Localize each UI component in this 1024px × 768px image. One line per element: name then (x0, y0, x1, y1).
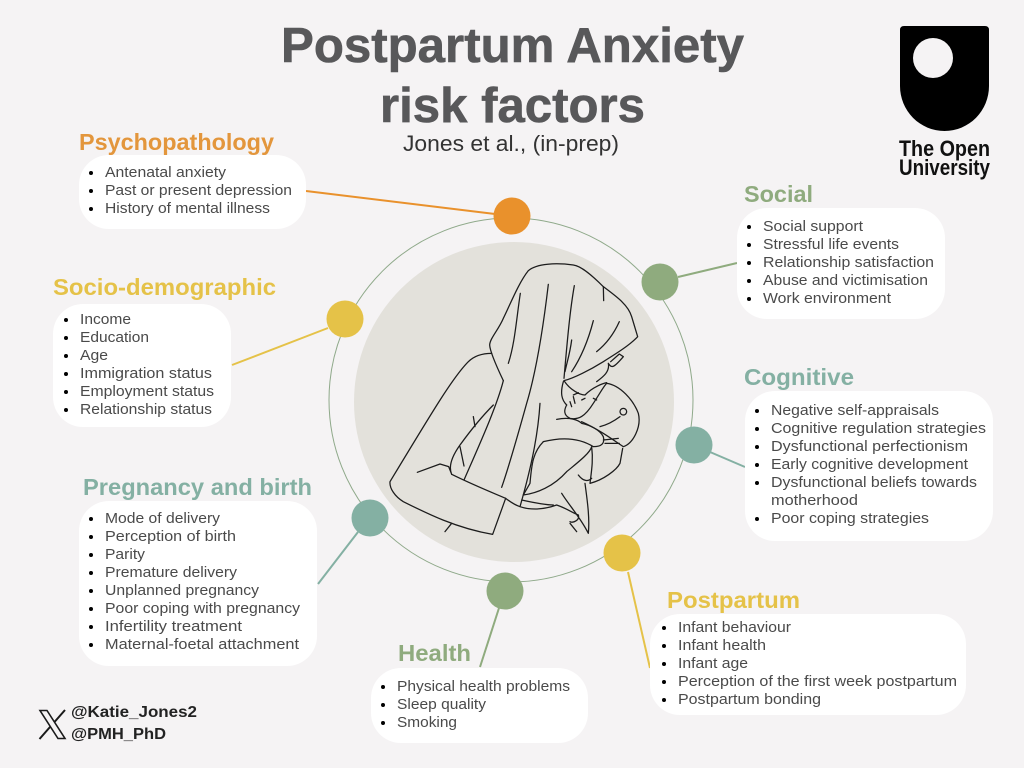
panel: pregnancy and birth (79, 474, 317, 666)
panel: cognitive: Dysfunctional beliefs towards (771, 475, 977, 491)
panel: social: Social (744, 181, 813, 207)
connector: socio-demographic (232, 328, 328, 365)
panel: social (737, 181, 945, 319)
connector: postpartum (628, 572, 650, 668)
panel: socio-demographic: Relationship status (80, 402, 212, 418)
panel: pregnancy and birth: Infertility treatment (105, 619, 242, 635)
panel: health: Smoking (397, 715, 457, 731)
panel: social: Social support (763, 219, 863, 235)
panel: socio-demographic: Socio-demographic (53, 274, 276, 300)
connector: cognitive (710, 452, 745, 467)
panel: postpartum: Infant health (678, 638, 766, 654)
social handles: @Katie_Jones2 (71, 704, 197, 721)
panel: psychopathology: Psychopathology (79, 129, 274, 155)
panel: health: Physical health problems (397, 679, 570, 695)
panel: social: Relationship satisfaction (763, 255, 934, 271)
panel: socio-demographic: Employment status (80, 384, 214, 400)
illustration: mother holding baby (390, 264, 639, 534)
panel: cognitive: Dysfunctional perfectionism (771, 439, 968, 455)
panel: social: Abuse and victimisation (763, 273, 928, 289)
panel: cognitive: Cognitive (744, 364, 854, 390)
panel: health (371, 640, 588, 743)
panel: cognitive: Early cognitive development (771, 457, 968, 473)
title: Postpartum Anxiety (281, 19, 744, 73)
title: risk factors (380, 79, 645, 133)
panel: social: Work environment (763, 291, 891, 307)
panel: pregnancy and birth: Perception of birth (105, 529, 236, 545)
social handles (71, 704, 197, 743)
panel: pregnancy and birth: Mode of delivery (105, 511, 221, 527)
logo: The Open University: University (899, 155, 991, 180)
panel: cognitive (744, 364, 993, 541)
panel: cognitive: motherhood (771, 493, 858, 509)
panel: psychopathology: Past or present depression (105, 183, 292, 199)
icon: X logo (40, 710, 65, 739)
panel: psychopathology: History of mental illness (105, 201, 270, 217)
panel: pregnancy and birth: Pregnancy and birth (83, 474, 312, 500)
node: socio-demographic (326, 300, 364, 338)
panel: postpartum: Perception of the first week postpartum (678, 674, 957, 690)
node: postpartum (604, 534, 640, 572)
panel: pregnancy and birth: Poor coping with pregnancy (105, 601, 301, 617)
panel: psychopathology: Antenatal anxiety (105, 165, 227, 181)
panel: pregnancy and birth: Premature delivery (105, 565, 238, 581)
panel: socio-demographic: Education (80, 330, 149, 346)
connector: pregnancy and birth (318, 532, 358, 584)
central ring (329, 218, 693, 582)
logo: The Open University: The Open (899, 136, 990, 161)
panel: social: Stressful life events (763, 237, 899, 253)
panel: socio-demographic: Immigration status (80, 366, 212, 382)
panel: psychopathology (79, 129, 306, 229)
logo: The Open University (899, 26, 991, 180)
panel: postpartum: Postpartum bonding (678, 692, 821, 708)
node: pregnancy and birth (352, 500, 388, 536)
panel: postpartum: Postpartum (667, 587, 800, 613)
panel: postpartum: Infant age (678, 656, 748, 672)
panel: socio-demographic: Income (80, 312, 131, 328)
panel: socio-demographic (53, 274, 276, 427)
connector: social (678, 263, 737, 277)
panel: cognitive: Negative self-appraisals (771, 403, 939, 419)
node: social (642, 264, 678, 300)
panel: cognitive: Cognitive regulation strategies (771, 421, 986, 437)
panel: pregnancy and birth: Maternal-foetal attachment (105, 637, 299, 653)
central disk (354, 242, 674, 562)
citation: Jones et al., (in-prep) (403, 131, 619, 156)
panel: health: Sleep quality (397, 697, 487, 713)
panel: postpartum (650, 587, 966, 715)
node: psychopathology (494, 198, 530, 234)
title (281, 19, 744, 133)
connector: health (480, 608, 499, 667)
node: cognitive (676, 426, 712, 464)
panel: pregnancy and birth: Unplanned pregnancy (105, 583, 260, 599)
panel: health: Health (398, 640, 471, 666)
panel: socio-demographic: Age (80, 348, 108, 364)
panel: cognitive: Poor coping strategies (771, 511, 929, 527)
connector: psychopathology (306, 191, 495, 214)
node: health (486, 572, 524, 610)
social handles: @PMH_PhD (71, 726, 166, 743)
panel: pregnancy and birth: Parity (105, 547, 146, 563)
panel: postpartum: Infant behaviour (678, 620, 791, 636)
